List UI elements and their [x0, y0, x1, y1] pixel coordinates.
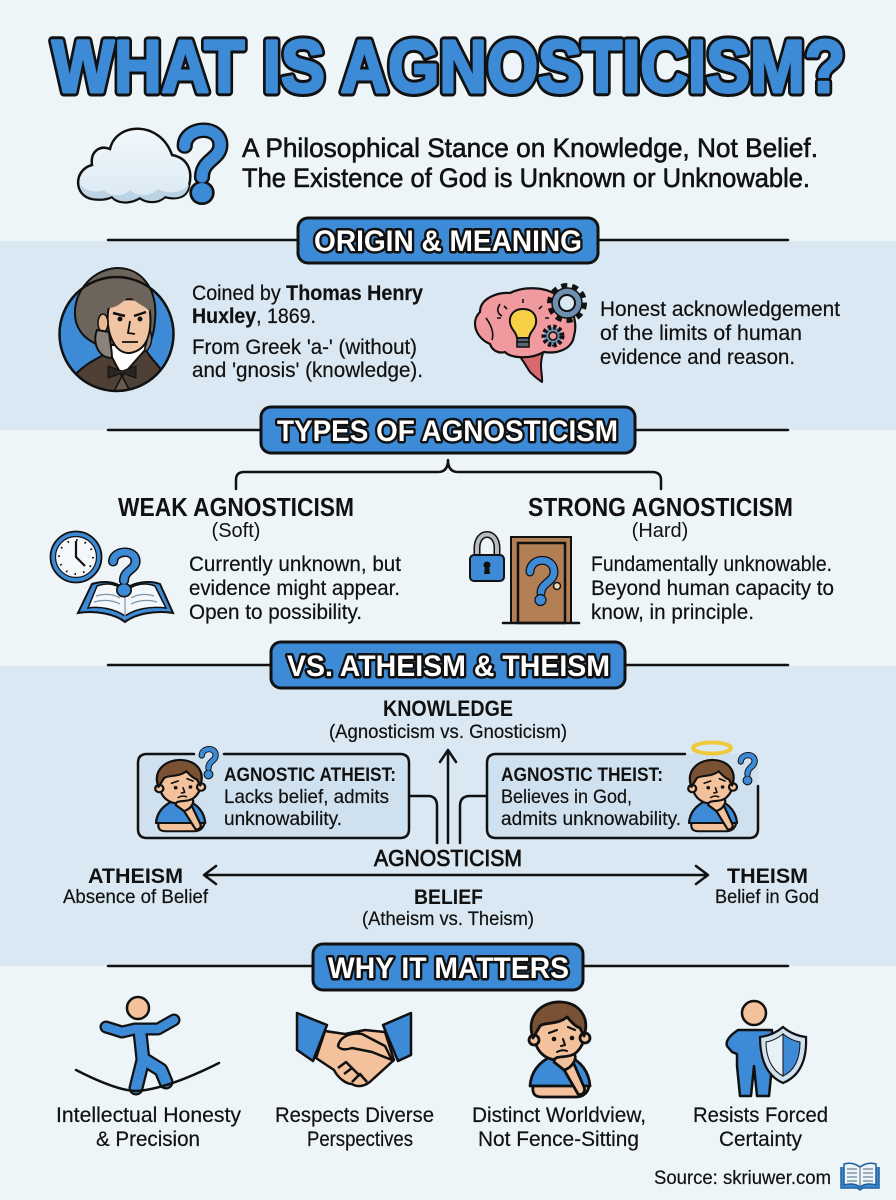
icon: thinking person with halo: [688, 760, 737, 831]
heading: origin and meaning: [108, 218, 788, 263]
label: atheism: Absence of Belief: [63, 886, 209, 908]
heading: vs atheism and theism: VS. ATHEISM & THEISM: [287, 650, 610, 683]
icon: halo: [693, 742, 731, 754]
text: honest acknowledgement: [600, 298, 840, 369]
label: theism: Belief in God: [715, 886, 819, 908]
item: resists forced certainty: [693, 1001, 828, 1151]
text: theist description: Believes in God,: [501, 786, 632, 808]
axis label: knowledge: KNOWLEDGE: [383, 696, 513, 721]
band: comparison section: [0, 666, 896, 966]
label: Not Fence-Sitting: [478, 1127, 639, 1151]
axis label: knowledge: (Agnosticism vs. Gnosticism): [329, 722, 567, 743]
icon: clock and open book: [50, 532, 173, 622]
panel: weak agnosticism: [50, 492, 401, 624]
label: Intellectual Honesty: [56, 1103, 241, 1127]
label: & Precision: [96, 1127, 200, 1151]
axis label: belief: [362, 886, 534, 930]
subtitle: The Existence of God is Unknown or Unknowable.: [242, 163, 810, 193]
label: atheism: [63, 865, 209, 908]
text: weak description: evidence might appear.: [189, 577, 400, 600]
label: [693, 1103, 828, 1151]
icon: handshake: [297, 1013, 411, 1086]
label: atheism: ATHEISM: [88, 865, 183, 888]
axis label: belief: (Atheism vs. Theism): [362, 909, 534, 930]
icon: person with shield: [727, 1001, 806, 1096]
axis label: knowledge: [329, 696, 567, 743]
label: Perspectives: [307, 1127, 413, 1151]
icon: thinking person: [155, 760, 205, 831]
item: intellectual honesty: [56, 997, 241, 1151]
callout: agnostic atheist: [138, 749, 437, 843]
item: distinct worldview: [472, 1002, 646, 1151]
heading: vs atheism and theism: [108, 642, 788, 688]
icon: cloud with question mark: [78, 129, 220, 204]
icon: question mark: [202, 749, 216, 779]
heading: why it matters: [108, 944, 788, 990]
axis label: belief: BELIEF: [414, 886, 483, 909]
subtitle: A Philosophical Stance on Knowledge, Not Belief.: [242, 133, 818, 163]
text: weak description: Open to possibility.: [189, 601, 362, 624]
arrow: belief axis: [204, 866, 708, 884]
text: origin of the word: and 'gnosis' (knowledge).: [192, 359, 423, 382]
heading: types of agnosticism: TYPES OF AGNOSTICISM: [277, 415, 618, 448]
icon: thinking person: [529, 1002, 590, 1097]
source credit: Source: skriuwer.com: [654, 1167, 831, 1189]
subtitle: [242, 133, 818, 193]
label: Certainty: [719, 1127, 802, 1151]
label: [275, 1103, 434, 1151]
text: atheist description: unknowability.: [224, 808, 342, 830]
icon: question mark: [741, 755, 755, 785]
bracket connector: [236, 460, 661, 489]
text: theist description: AGNOSTIC THEIST:: [501, 764, 663, 786]
icon: brain, bulb and gears: [475, 287, 583, 382]
heading: origin and meaning: ORIGIN & MEANING: [314, 225, 582, 258]
text: origin of the word: Huxley, 1869.: [192, 305, 316, 328]
band: origin section: [0, 241, 896, 430]
text: origin of the word: From Greek 'a-' (without): [192, 336, 417, 359]
text: origin of the word: [192, 282, 423, 382]
label: [472, 1103, 646, 1151]
portrait: Thomas Henry Huxley: [60, 268, 174, 395]
item: diverse perspectives: [275, 1013, 434, 1151]
label: Respects Diverse: [275, 1103, 434, 1127]
arrow: knowledge axis: [440, 750, 456, 843]
text: weak description: Currently unknown, but: [189, 553, 401, 576]
text: theist description: admits unknowability.: [501, 808, 681, 830]
heading: why it matters: WHY IT MATTERS: [328, 952, 569, 985]
text: weak description: [189, 553, 401, 624]
text: honest acknowledgement: Honest acknowledgement: [600, 298, 840, 321]
panel: weak agnosticism: WEAK AGNOSTICISM: [118, 492, 354, 522]
callout: agnostic theist: [460, 742, 758, 843]
label: theism: [715, 865, 819, 908]
text: atheist description: [224, 764, 396, 830]
text: honest acknowledgement: of the limits of human: [600, 322, 802, 345]
icon: padlock and door: [470, 534, 579, 623]
label: Distinct Worldview,: [472, 1103, 646, 1127]
label: agnosticism: AGNOSTICISM: [374, 845, 522, 871]
panel: weak agnosticism: (Soft): [212, 520, 260, 542]
text: origin of the word: Coined by Thomas Henry: [192, 282, 423, 305]
text: atheist description: AGNOSTIC ATHEIST:: [224, 764, 396, 786]
heading: types of agnosticism: [108, 407, 788, 453]
panel: strong agnosticism: [470, 492, 834, 624]
label: Resists Forced: [693, 1103, 828, 1127]
text: theist description: [501, 764, 681, 830]
icon: small book: [841, 1163, 879, 1190]
text: atheist description: Lacks belief, admits: [224, 786, 389, 808]
label: [56, 1103, 241, 1151]
panel: strong agnosticism: (Hard): [632, 520, 688, 542]
text: strong description: Fundamentally unknowable.: [591, 553, 832, 576]
text: strong description: [591, 553, 834, 624]
panel: strong agnosticism: STRONG AGNOSTICISM: [528, 492, 793, 522]
icon: tightrope walker: [76, 997, 219, 1091]
text: strong description: know, in principle.: [591, 601, 754, 624]
text: honest acknowledgement: evidence and reason.: [600, 346, 795, 369]
text: strong description: Beyond human capacity to: [591, 577, 834, 600]
label: theism: THEISM: [727, 865, 808, 888]
